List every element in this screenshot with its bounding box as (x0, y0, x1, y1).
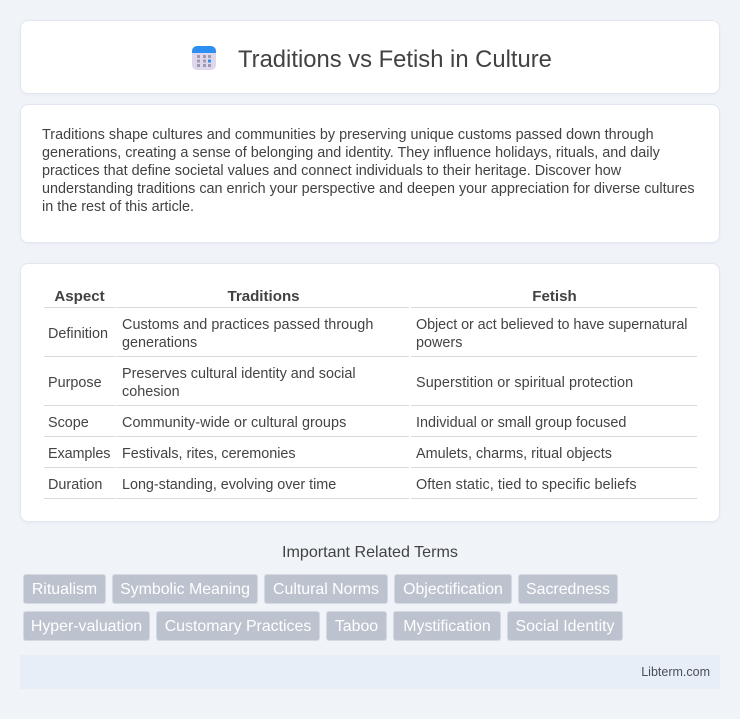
row: examples: Examples (48, 446, 110, 462)
row: scope: Scope (48, 415, 89, 431)
row: duration (48, 477, 637, 493)
row: duration: Often static, tied to specific beliefs (416, 477, 637, 493)
row: scope: Individual or small group focused (416, 415, 626, 431)
row: scope (48, 415, 626, 431)
related terms tags: Taboo (335, 618, 378, 635)
intro text: generations, creating a sense of belonging and identity. They influence holidays, rituals, and daily (42, 145, 660, 161)
footer credit: Libterm.com (641, 665, 710, 679)
table header: Traditions (227, 288, 300, 305)
row: definition: powers (416, 335, 462, 351)
intro text (42, 127, 695, 215)
intro text: Traditions shape cultures and communities by preserving unique customs passed down through (42, 127, 654, 143)
row: duration: Duration (48, 477, 102, 493)
row: definition (48, 317, 687, 351)
related terms tags: Social Identity (516, 618, 614, 635)
icon: calendar (192, 46, 216, 70)
panel: header (20, 20, 720, 94)
related terms tags: Cultural Norms (273, 581, 379, 598)
related terms tags: Sacredness (526, 581, 610, 598)
row: examples: Festivals, rites, ceremonies (122, 446, 296, 462)
heading: important related terms: Important Related Terms (282, 543, 458, 561)
row: definition: Customs and practices passed through (122, 317, 373, 333)
row: definition: Definition (48, 326, 108, 342)
panel: comparison table (20, 263, 720, 522)
related terms tags: Symbolic Meaning (120, 581, 250, 598)
related terms tags: Customary Practices (165, 618, 311, 635)
related terms tags: Ritualism (32, 581, 97, 598)
row: definition: generations (122, 335, 197, 351)
row: purpose: Superstition or spiritual protection (416, 375, 633, 391)
related terms tags: Mystification (403, 618, 491, 635)
row: definition: Object or act believed to have supernatural (416, 317, 687, 333)
row: purpose: Preserves cultural identity and social (122, 366, 356, 382)
row: scope: Community-wide or cultural groups (122, 415, 346, 431)
row: duration: Long-standing, evolving over time (122, 477, 336, 493)
row: purpose (48, 366, 633, 400)
row: examples (48, 446, 612, 462)
row: examples: Amulets, charms, ritual objects (416, 446, 612, 462)
table header: Fetish (532, 288, 577, 305)
intro text: in the rest of this article. (42, 199, 194, 215)
title: Traditions vs Fetish in Culture (238, 46, 552, 73)
related terms tags: Hyper-valuation (31, 618, 142, 635)
related terms tags: Objectification (403, 581, 503, 598)
intro text: practices that define societal values and connect individuals to their heritage. Discover how (42, 163, 621, 179)
row: purpose: Purpose (48, 375, 102, 391)
table header: Aspect (54, 288, 105, 305)
intro text: understanding traditions can enrich your perspective and deepen your appreciation for diverse cultures (42, 181, 695, 197)
footer (20, 655, 720, 689)
related terms tags (23, 574, 623, 641)
table header (54, 288, 577, 305)
panel: intro (20, 104, 720, 243)
row: purpose: cohesion (122, 384, 180, 400)
